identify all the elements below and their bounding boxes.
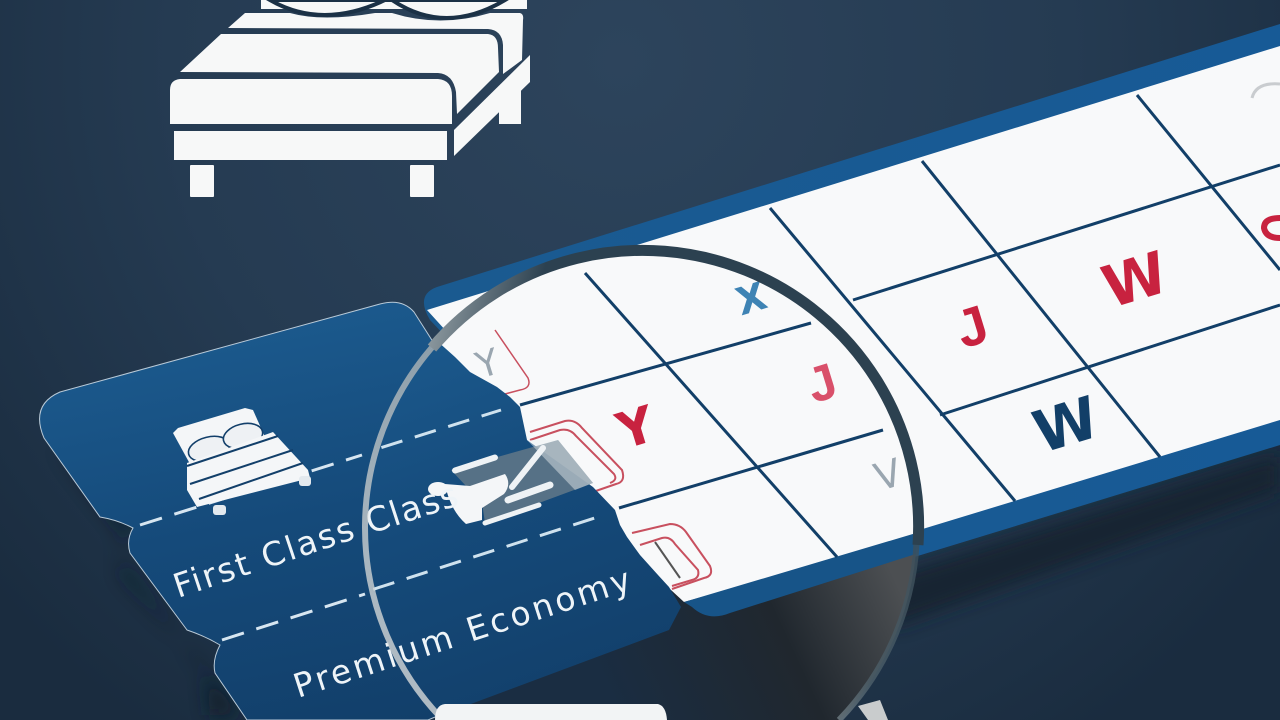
- cell letter J: J: [949, 294, 995, 360]
- red letter J: J: [801, 352, 843, 414]
- cell letter W navy: W: [1025, 383, 1107, 467]
- grey Y with red outline: [494, 330, 530, 394]
- white bar at bottom: [435, 704, 667, 720]
- partial red symbol: [1264, 218, 1280, 238]
- lens contents: [367, 265, 916, 720]
- lens rim: [365, 252, 917, 720]
- icon: lie-flat seat: [428, 440, 593, 524]
- red outline seat box top: [530, 421, 623, 493]
- dashed tear lines magnified: [381, 408, 502, 449]
- lens contents: V: [869, 450, 907, 500]
- red outline seat box bottom: [632, 524, 711, 589]
- label: First Class: First Class: [168, 509, 359, 606]
- handle collar: [858, 700, 888, 720]
- label: Premium Economy: Premium Economy: [288, 560, 635, 706]
- icon: small bed: [173, 408, 311, 515]
- red letter Y: Y: [609, 395, 663, 461]
- panel: fare class table strip: [424, 24, 1280, 615]
- dashed tear line lower: [222, 594, 365, 640]
- icon: large bed: [170, 0, 530, 197]
- faded symbols: X: [731, 274, 772, 324]
- shadow under ticket: [730, 455, 1280, 625]
- label: Class magnified: Class: [360, 475, 463, 543]
- dashed tear line upper: [140, 455, 362, 525]
- lens contents: Y: [470, 341, 505, 388]
- magnifying glass: [362, 244, 924, 720]
- partial grey symbol: [1252, 84, 1280, 98]
- magnified table: [422, 256, 914, 602]
- cell letter W red: W: [1094, 238, 1176, 322]
- label: Economy magnified: Premium Economy: [288, 560, 635, 706]
- grid lines: [770, 95, 1280, 501]
- torn blue card in lens: [365, 345, 681, 712]
- panel: cabin class ticket stub: [40, 302, 690, 720]
